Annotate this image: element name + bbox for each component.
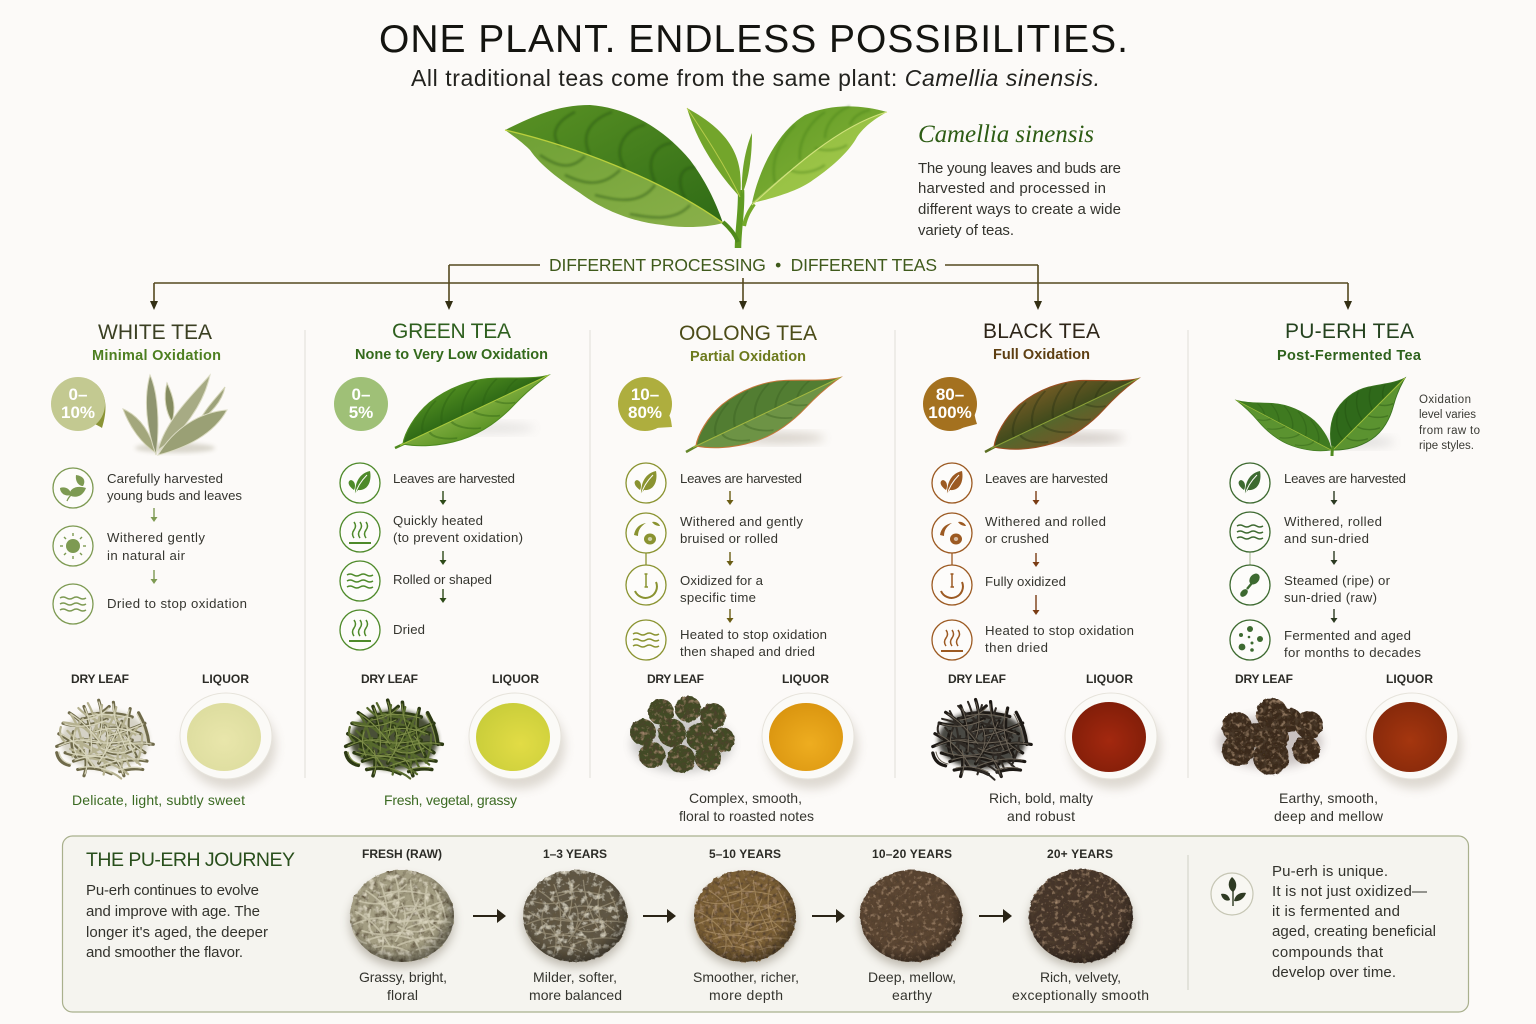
step: steam: [1230, 565, 1391, 605]
arrow: [440, 589, 446, 603]
flavor note: [679, 790, 814, 824]
stage: 20+ years: [1012, 847, 1149, 1003]
journey description: longer it's aged, the deeper: [86, 924, 268, 941]
step: heat: Heated to stop oxidation: [985, 623, 1134, 638]
step: harvest: Leaves are harvested: [1284, 471, 1406, 486]
callout: pu-erh is unique: compounds that: [1272, 944, 1384, 961]
step: dry: [53, 584, 247, 624]
step: steam: Steamed (ripe) or: [1284, 573, 1391, 588]
subheading: Minimal Oxidation: [92, 348, 221, 364]
badge: 0-10%: 0–: [69, 385, 87, 404]
banner: different processing: DIFFERENT PROCESSING • DIFFERENT TEAS: [549, 255, 937, 275]
arrow: [1032, 491, 1040, 505]
stage: 1-3 years: 1–3 YEARS: [543, 847, 607, 861]
arrow: [150, 508, 158, 522]
dry leaf and liquor: [340, 672, 565, 789]
title: ONE PLANT. ENDLESS POSSIBILITIES.: [379, 18, 1128, 61]
step: oxidize: Oxidized for a: [680, 573, 764, 588]
callout: pu-erh is unique: It is not just oxidized—: [1272, 883, 1427, 900]
dry leaf and liquor: DRY LEAF: [71, 672, 129, 686]
illustration: oxidized leaf: [978, 351, 1148, 469]
heading: pu-erh tea: PU-ERH TEA: [1285, 320, 1414, 343]
arrow: [1330, 491, 1338, 505]
journey description: [86, 882, 268, 961]
badge: 80-100%: [923, 377, 977, 431]
step: dry: Dried: [393, 622, 425, 637]
heading: oolong tea: OOLONG TEA: [679, 322, 817, 345]
badge: 80-100%: 80–: [936, 385, 964, 404]
step: wither: or crushed: [985, 531, 1049, 546]
badge: 10-80%: 10–: [631, 385, 659, 404]
step: heat: Quickly heated: [393, 513, 483, 528]
flavor note: [1274, 790, 1384, 824]
callout: pu-erh is unique: aged, creating beneficial: [1272, 923, 1436, 940]
arrow: [979, 909, 1012, 923]
step: harvest: [932, 463, 1108, 503]
stage: 10-20 years: Deep, mellow,: [868, 969, 956, 985]
stage: 1-3 years: [523, 847, 627, 1003]
step: wither: [626, 513, 803, 566]
arrow: [1032, 595, 1040, 615]
heading: white tea: WHITE TEA: [98, 321, 212, 344]
dry leaf and liquor: LIQUOR: [1086, 672, 1133, 686]
step: wither: [53, 526, 205, 566]
dry leaf and liquor: LIQUOR: [1386, 672, 1433, 686]
stage: 10-20 years: [860, 847, 962, 1003]
step: wither: in natural air: [107, 548, 186, 563]
flavor note: deep and mellow: [1274, 808, 1384, 824]
illustration: two leaves: [1229, 359, 1420, 466]
panel: green tea: [334, 320, 565, 808]
dry leaf and liquor: [51, 672, 276, 789]
step: heat: [626, 620, 827, 660]
note: oxidation varies: Oxidation: [1419, 394, 1471, 406]
illustration: white buds: [123, 375, 227, 455]
step: roll: Withered, rolled: [1284, 514, 1382, 529]
step: wither: Withered gently: [107, 530, 205, 545]
arrow: [726, 609, 734, 623]
step: roll: and sun-dried: [1284, 531, 1369, 546]
stage: fresh raw: Grassy, bright,: [359, 969, 447, 985]
subheading: Post-Fermented Tea: [1277, 348, 1422, 364]
dry leaf and liquor: DRY LEAF: [1235, 672, 1293, 686]
stage: 5-10 years: Smoother, richer,: [693, 969, 799, 985]
step: harvest: [340, 463, 515, 503]
step: harvest: [1230, 463, 1406, 503]
arrow: [473, 909, 506, 923]
flavor note: Earthy, smooth,: [1279, 790, 1378, 806]
stage: fresh raw: FRESH (RAW): [362, 847, 442, 861]
note: oxidation varies: ripe styles.: [1419, 440, 1474, 452]
text block: Camellia sinensis: different ways to create a wide: [918, 201, 1121, 218]
text block: Camellia sinensis: variety of teas.: [918, 222, 1014, 239]
arrow: [1330, 551, 1338, 565]
step: harvest: [53, 468, 242, 508]
badge: 0-5%: [334, 377, 388, 431]
journey description: Pu-erh continues to evolve: [86, 882, 259, 899]
step: oxidize: Fully oxidized: [985, 574, 1066, 589]
step: roll: Rolled or shaped: [393, 572, 492, 587]
stage: 5-10 years: [693, 847, 799, 1003]
callout: pu-erh is unique: it is fermented and: [1272, 903, 1400, 920]
subheading: None to Very Low Oxidation: [355, 347, 548, 363]
badge: 10-80%: [618, 377, 672, 431]
step: steam: sun-dried (raw): [1284, 590, 1377, 605]
stage: 10-20 years: earthy: [892, 987, 932, 1003]
badge: 0-5%: 5%: [349, 403, 373, 422]
tree connector arrows: [150, 265, 1352, 310]
note: oxidation varies: level varies: [1419, 409, 1476, 421]
panel: oolong tea: [618, 322, 858, 824]
step: dry: Dried to stop oxidation: [107, 596, 247, 611]
arrow: [150, 570, 158, 584]
badge: 80-100%: 100%: [928, 403, 972, 422]
flavor note: Delicate, light, subtly sweet: [72, 792, 245, 808]
dry leaf and liquor: [630, 672, 858, 789]
flavor note: and robust: [1007, 808, 1075, 824]
illustration: tea plant leaves: [505, 105, 887, 248]
flavor note: Rich, bold, malty: [989, 790, 1093, 806]
heading: the pu-erh journey: THE PU-ERH JOURNEY: [86, 849, 295, 871]
stage: fresh raw: floral: [387, 987, 418, 1003]
step: heat: [340, 512, 523, 552]
step: harvest: [626, 463, 802, 503]
arrow: [726, 552, 734, 566]
arrow: [1032, 553, 1040, 567]
step: harvest: Leaves are harvested: [680, 471, 802, 486]
step: roll: [340, 561, 492, 601]
dry leaf and liquor: LIQUOR: [492, 672, 539, 686]
badge: 0-5%: 0–: [352, 385, 370, 404]
step: harvest: Leaves are harvested: [985, 471, 1108, 486]
callout: pu-erh is unique: Pu-erh is unique.: [1272, 863, 1388, 880]
illustration: oolong leaf: [681, 351, 850, 467]
badge: 0-10%: 10%: [61, 403, 95, 422]
step: harvest: Carefully harvested: [107, 471, 223, 486]
step: wither: Withered and gently: [680, 514, 803, 529]
step: oxidize: [932, 565, 1066, 605]
arrow: [812, 909, 845, 923]
arrow: [1330, 609, 1338, 623]
step: heat: then dried: [985, 640, 1048, 655]
dry leaf and liquor: [1218, 672, 1462, 789]
step: heat: then shaped and dried: [680, 644, 815, 659]
subheading: Full Oxidation: [993, 347, 1090, 363]
illustration: green leaf: [388, 349, 558, 465]
stage: fresh raw: [350, 847, 454, 1003]
dry leaf and liquor: DRY LEAF: [361, 672, 418, 686]
step: ferment: [1230, 620, 1421, 660]
step: ferment: Fermented and aged: [1284, 628, 1411, 643]
step: harvest: Leaves are harvested: [393, 471, 515, 486]
panel: pu-erh journey: [62, 836, 1468, 1012]
badge: 0-10%: [51, 377, 106, 431]
step: heat: Heated to stop oxidation: [680, 627, 827, 642]
journey description: and smoother the flavor.: [86, 944, 243, 961]
heading: green tea: GREEN TEA: [392, 320, 511, 343]
arrow: [726, 491, 734, 505]
stage: 20+ years: 20+ YEARS: [1047, 847, 1113, 861]
subtitle: All traditional teas come from the same plant: Camellia sinensis.: [411, 65, 1100, 91]
stage: 20+ years: Rich, velvety,: [1040, 969, 1121, 985]
arrow: [440, 551, 446, 565]
step: ferment: for months to decades: [1284, 645, 1421, 660]
stage: 5-10 years: more depth: [709, 987, 783, 1003]
stage: 1-3 years: Milder, softer,: [533, 969, 617, 985]
step: heat: (to prevent oxidation): [393, 530, 523, 545]
dry leaf and liquor: DRY LEAF: [647, 672, 704, 686]
stage: 20+ years: exceptionally smooth: [1012, 987, 1149, 1003]
stage: 5-10 years: 5–10 YEARS: [709, 847, 781, 861]
flavor note: [989, 790, 1093, 824]
text block: Camellia sinensis: harvested and processed in: [918, 180, 1106, 197]
step: oxidize: specific time: [680, 590, 756, 605]
step: wither: [932, 513, 1106, 566]
note: oxidation varies: from raw to: [1419, 425, 1480, 437]
step: oxidize: [626, 565, 764, 605]
text block: Camellia sinensis: Camellia sinensis: [918, 121, 1094, 148]
text block: Camellia sinensis: [918, 121, 1121, 239]
badge: 10-80%: 80%: [628, 403, 662, 422]
callout: pu-erh is unique: develop over time.: [1272, 964, 1396, 981]
note: oxidation varies: [1419, 394, 1480, 452]
step: roll: [1230, 512, 1382, 566]
icon: sprout: [1211, 873, 1253, 915]
flavor note: Complex, smooth,: [689, 790, 802, 806]
dry leaf and liquor: LIQUOR: [782, 672, 829, 686]
heading: black tea: BLACK TEA: [983, 320, 1100, 343]
dry leaf and liquor: [928, 672, 1161, 790]
callout: pu-erh is unique: [1272, 863, 1436, 981]
panel: pu-erh tea: [1218, 320, 1480, 824]
dry leaf and liquor: LIQUOR: [202, 672, 249, 686]
panel: black tea: [923, 320, 1161, 824]
stage: 1-3 years: more balanced: [529, 987, 622, 1003]
dry leaf and liquor: DRY LEAF: [948, 672, 1006, 686]
step: wither: Withered and rolled: [985, 514, 1106, 529]
arrow: [643, 909, 676, 923]
step: harvest: young buds and leaves: [107, 488, 242, 503]
step: dry: [340, 610, 425, 650]
panel: white tea: [51, 321, 276, 808]
arrow: [440, 491, 446, 505]
text block: Camellia sinensis: The young leaves and buds are: [918, 160, 1121, 177]
flavor note: Fresh, vegetal, grassy: [384, 792, 517, 808]
stage: 10-20 years: 10–20 YEARS: [872, 847, 952, 861]
flavor note: floral to roasted notes: [679, 808, 814, 824]
step: wither: bruised or rolled: [680, 531, 778, 546]
subheading: Partial Oxidation: [690, 349, 806, 365]
journey description: and improve with age. The: [86, 903, 260, 920]
step: heat: [932, 620, 1134, 660]
